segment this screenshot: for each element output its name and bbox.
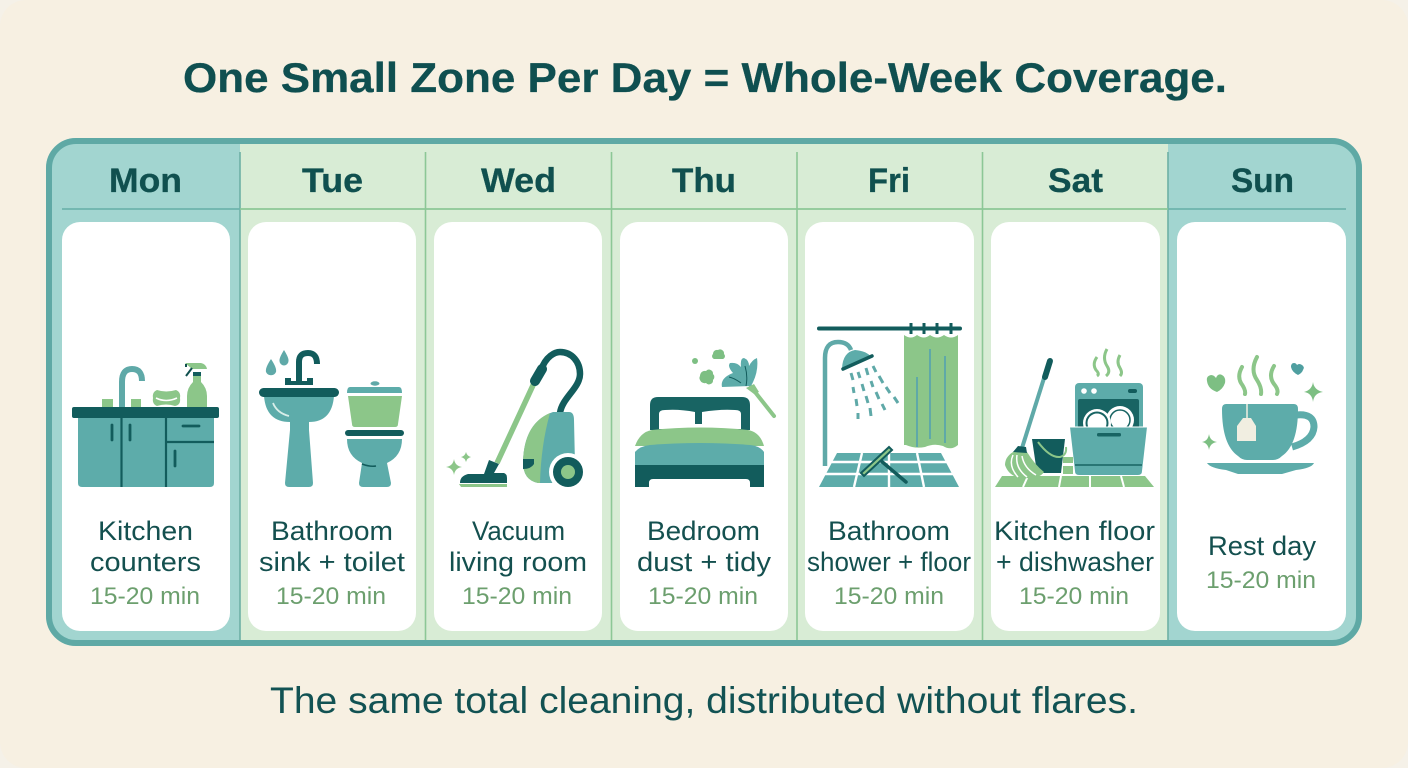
icon: bed and duster xyxy=(635,349,774,487)
label: Thursday task: Bedroom xyxy=(647,516,760,546)
label: Monday task: counters xyxy=(90,547,201,577)
label: Tuesday task: 15-20 min xyxy=(276,583,386,610)
label: Saturday task: 15-20 min xyxy=(1019,583,1129,610)
label: Friday task xyxy=(807,516,971,610)
day headers: Thu xyxy=(672,162,736,200)
icon: shower and tile floor xyxy=(819,323,960,487)
label: Sunday rest xyxy=(1206,531,1317,594)
label: Saturday task: Kitchen floor xyxy=(994,516,1155,546)
label: Wednesday task xyxy=(449,516,587,610)
icon: mop and bucket xyxy=(995,361,1154,487)
day headers: Mon xyxy=(109,162,182,200)
label: Friday task: shower + floor xyxy=(807,547,971,577)
label: Friday task: 15-20 min xyxy=(834,583,944,610)
label: Sunday rest: Rest day xyxy=(1208,531,1317,561)
day headers: Tue xyxy=(302,162,363,200)
day headers xyxy=(109,162,1294,200)
day headers: Sun xyxy=(1231,162,1294,200)
subtitle: The same total cleaning, distributed without flares. xyxy=(270,680,1138,721)
label: Saturday task xyxy=(994,516,1155,610)
label: Wednesday task: living room xyxy=(449,547,587,577)
label: Thursday task: 15-20 min xyxy=(648,583,758,610)
day headers: Fri xyxy=(868,162,910,200)
label: Friday task: Bathroom xyxy=(828,516,950,546)
title: One Small Zone Per Day = Whole-Week Coverage. xyxy=(183,54,1227,101)
label: Saturday task: + dishwasher xyxy=(996,547,1154,577)
weekly calendar panel xyxy=(46,138,1362,646)
label: Tuesday task: sink + toilet xyxy=(259,547,406,577)
icon: kitchen counter xyxy=(72,363,219,487)
icon: toilet xyxy=(345,381,404,487)
label: Monday task: Kitchen xyxy=(98,516,193,546)
icon: dishwasher xyxy=(1070,349,1147,475)
label: Thursday task: dust + tidy xyxy=(637,547,772,577)
day headers: Wed xyxy=(481,162,556,200)
label: Tuesday task: Bathroom xyxy=(271,516,393,546)
icon: tea cup xyxy=(1202,357,1323,474)
white day cards xyxy=(62,222,1346,631)
label: Wednesday task: 15-20 min xyxy=(462,583,572,610)
day headers: Sat xyxy=(1048,162,1103,200)
icon: bathroom sink xyxy=(259,350,339,487)
label: Sunday rest: 15-20 min xyxy=(1206,567,1316,594)
label: Tuesday task xyxy=(259,516,406,610)
label: Monday task xyxy=(90,516,201,610)
label: Wednesday task: Vacuum xyxy=(472,516,565,546)
icon: vacuum cleaner xyxy=(446,352,587,491)
label: Thursday task xyxy=(637,516,772,610)
label: Monday task: 15-20 min xyxy=(90,583,200,610)
